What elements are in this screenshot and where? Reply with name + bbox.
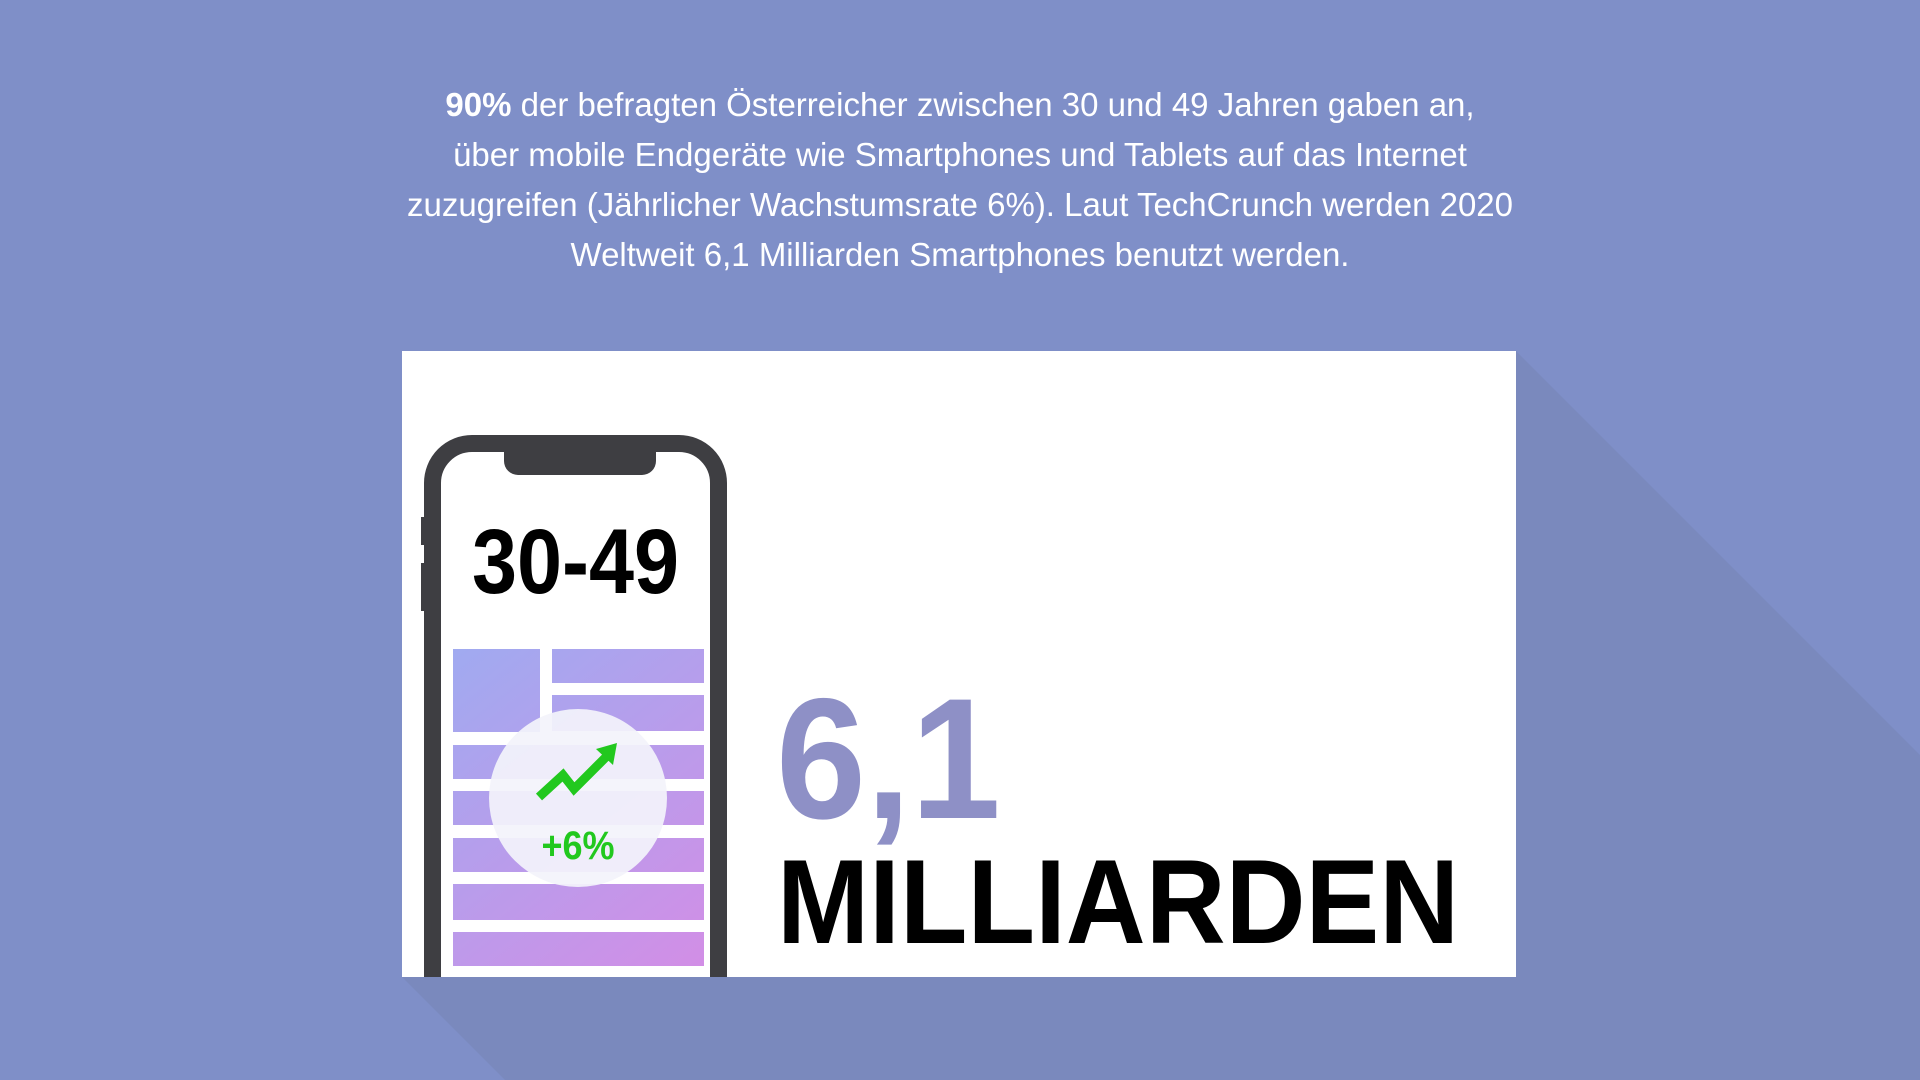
age label 30-49: 30-49 [472, 511, 679, 613]
growth badge: +6% [541, 824, 615, 868]
intro text: zuzugreifen (Jährlicher Wachstumsrate 6%). Laut TechCrunch werden 2020 [407, 186, 1513, 223]
growth badge [489, 709, 667, 887]
bar chart blocks [453, 649, 704, 966]
notch [504, 447, 656, 475]
intro text: über mobile Endgeräte wie Smartphones und Tablets auf das Internet [453, 136, 1467, 173]
intro text: Weltweit 6,1 Milliarden Smartphones benutzt werden. [571, 236, 1349, 273]
panel: white card [402, 351, 1516, 977]
intro text: 90% der befragten Österreicher zwischen 30 und 49 Jahren gaben an, [445, 86, 1475, 123]
MILLIARDEN label: MILLIARDEN [777, 835, 1459, 969]
phone frame [424, 435, 727, 1069]
intro text [407, 86, 1513, 273]
phone illustration [421, 435, 727, 977]
big number 6,1: 6,1 [776, 663, 1001, 855]
side buttons [421, 517, 425, 545]
